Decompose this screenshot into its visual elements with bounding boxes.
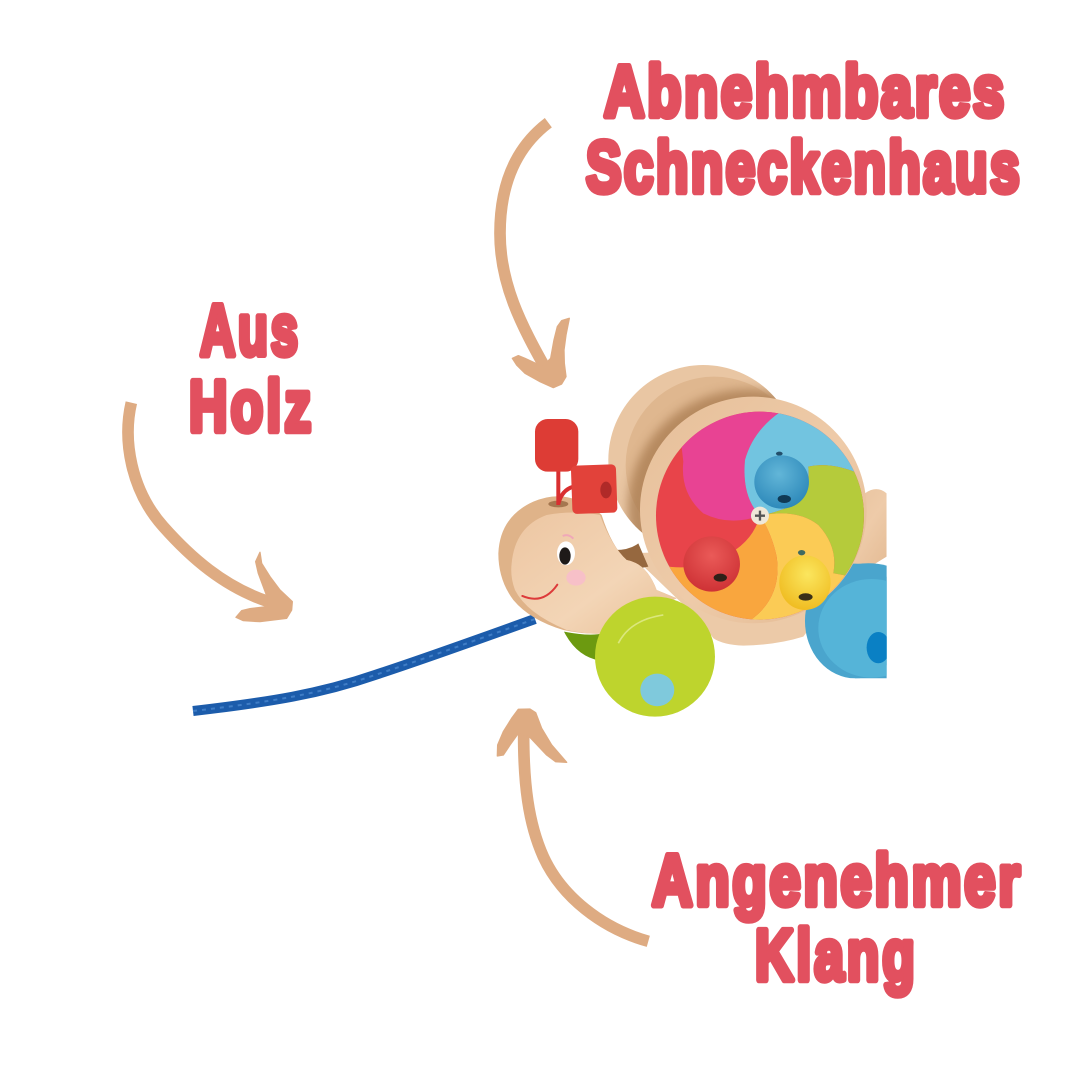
smile [522, 585, 557, 599]
heading: Angenehmer Klang: Angenehmer [652, 840, 1020, 921]
body tail [630, 489, 887, 646]
cheek [566, 570, 586, 586]
heading: Abnehmbares Schneckenhaus: Abnehmbares [604, 51, 1004, 132]
pull cord [193, 619, 535, 711]
shell: front disc [640, 397, 867, 623]
shell: rainbow swirl face [656, 412, 864, 620]
heading: Angenehmer Klang: Klang [755, 916, 915, 996]
heading: Abnehmbares Schneckenhaus [586, 51, 1020, 208]
shell: back disc [608, 365, 776, 533]
arrow: to wheels [497, 709, 648, 941]
red bead [683, 536, 740, 592]
heading: Angenehmer Klang [652, 840, 1020, 996]
heading: Aus Holz [189, 291, 311, 447]
heading: Aus Holz: Aus [200, 291, 298, 371]
blue wheel [804, 563, 887, 678]
wooden snail toy [498, 365, 925, 717]
arrow: to wood body [128, 403, 292, 622]
heading: Abnehmbares Schneckenhaus: Schneckenhaus [586, 128, 1020, 208]
yellow bead [779, 550, 831, 610]
rear wheel: green back [564, 632, 600, 660]
blue bead [754, 452, 809, 509]
screw [751, 507, 769, 525]
arrow: to snail shell [500, 123, 569, 388]
red antennae [535, 419, 617, 514]
eye [557, 541, 575, 565]
snail head and neck [498, 496, 677, 634]
green wheel [595, 597, 715, 717]
heading: Aus Holz: Holz [189, 367, 311, 447]
